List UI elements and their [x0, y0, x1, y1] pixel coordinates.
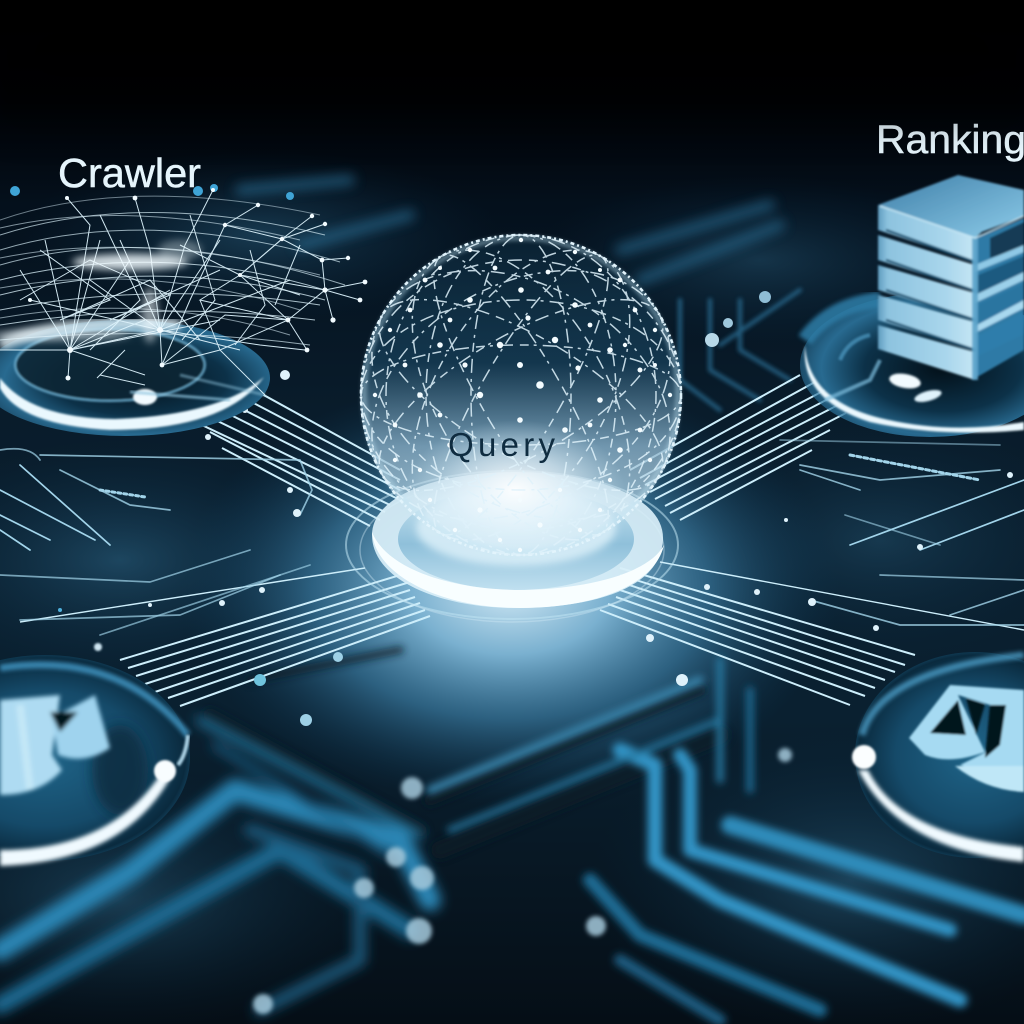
lower right blurred circuit board	[430, 660, 1024, 1020]
icon: balance scale left	[0, 695, 110, 795]
lower left scales platform	[0, 643, 190, 866]
blurred board nodes	[253, 748, 792, 1014]
label: Query: Query	[448, 426, 556, 463]
label: Crawler: Crawler	[58, 150, 201, 196]
scattered node dots	[10, 184, 1013, 726]
traces: centre to lower right	[600, 562, 1024, 705]
dark blurred panels below glow	[210, 650, 720, 850]
traces: centre to ranking	[630, 375, 846, 520]
traces: centre to crawler	[185, 382, 400, 526]
icon: balance scale right	[909, 685, 1024, 792]
lower left blurred circuit board	[0, 720, 430, 1010]
crawler network nodes	[28, 188, 367, 380]
globe network sphere	[327, 214, 715, 576]
lower right scales platform	[852, 652, 1024, 862]
side circuit lines left	[0, 449, 312, 635]
ranking platform	[800, 293, 1024, 437]
central glow	[180, 375, 840, 805]
top vignette	[0, 0, 1024, 110]
crawler bright network haze	[0, 240, 202, 343]
blurred background circuitry	[240, 180, 800, 410]
server stack icon	[878, 175, 1024, 380]
traces: centre to lower left	[20, 568, 430, 706]
crawler web network	[0, 190, 365, 395]
side circuit lines right	[780, 440, 1024, 625]
label: Ranking: Ranking	[876, 118, 1024, 162]
central query ring platform	[346, 471, 678, 622]
crawler platform	[0, 320, 270, 436]
